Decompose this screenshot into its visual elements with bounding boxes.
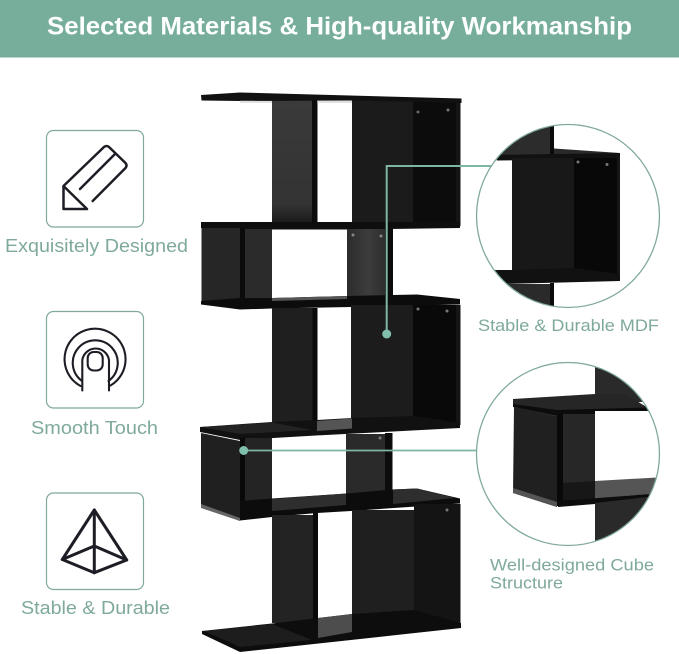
panel: icon Exquisitely Designed (5, 130, 188, 256)
header band with title (0, 0, 679, 58)
label: Stable & Durable: Stable & Durable (21, 597, 170, 618)
tier 2 shelf (201, 222, 460, 230)
tier 4 shelf (200, 416, 460, 440)
top shelf (201, 92, 462, 103)
detail circle: MDF shelf close-up (476, 120, 660, 314)
label: Well-designed Cube Structure (490, 556, 654, 592)
bottom shelf (202, 610, 461, 652)
label: Well-designed Cube Structure: Structure (490, 574, 563, 592)
connector: top callout to MDF detail (382, 166, 497, 338)
tier 5 shelf (240, 488, 460, 520)
tier 1 (272, 100, 313, 223)
label: Smooth Touch: Smooth Touch (31, 417, 158, 438)
icon: pyramid (62, 510, 127, 573)
label: Stable & Durable MDF: Stable & Durable MDF (478, 316, 659, 335)
shelf unit (200, 92, 462, 652)
icon: pencil (64, 146, 126, 209)
tier 2 cube (202, 228, 240, 302)
panel: icon Smooth Touch (31, 312, 158, 438)
tier 3 shelf (201, 294, 460, 310)
detail circle: cube structure close-up (476, 362, 665, 560)
connector: cube callout to structure detail (239, 446, 477, 455)
tier 4 cube (201, 433, 240, 521)
panel: icon Stable & Durable (21, 493, 170, 618)
label: Exquisitely Designed: Exquisitely Designed (5, 235, 188, 256)
icon: touch finger (65, 329, 126, 390)
header band with title: Selected Materials & High-quality Workmanship (47, 12, 632, 40)
label: Well-designed Cube Structure: Well-designed Cube (490, 556, 654, 574)
